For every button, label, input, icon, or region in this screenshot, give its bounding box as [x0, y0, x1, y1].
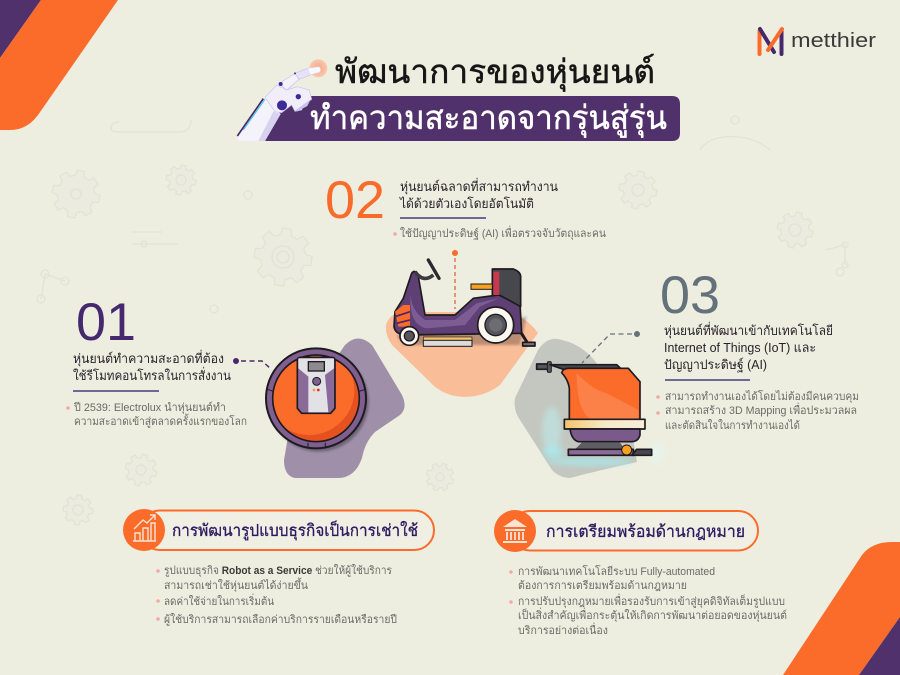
pill heading [140, 510, 434, 550]
blob: grey [515, 339, 637, 478]
panel: legal readiness [494, 510, 787, 637]
icon: robot hand [237, 59, 327, 141]
heading 01: หุ่นยนต์ทำความสะอาดที่ต้อง [73, 350, 224, 367]
connector: step 02 to scooter [452, 250, 458, 309]
connector: step 03 to machine [582, 331, 640, 363]
pill heading [510, 511, 758, 550]
panel: business model: ลดค่าใช้จ่ายในการเริ่มต้น [164, 593, 274, 608]
panel: legal readiness: เป็นสิ่งสำคัญเพื่อกระตุ้นให้เกิดการพัฒนาต่อยอดของหุ่นยนต์ [518, 607, 787, 622]
panel: legal readiness: ต้องการการเตรียมพร้อมด้านกฎหมาย [518, 579, 687, 592]
heading 03: หุ่นยนต์ที่พัฒนาเข้ากับเทคโนโลยี [664, 322, 833, 339]
panel: business model [123, 509, 434, 626]
panel: business model: สามารถเช่าใช้หุ่นยนต์ได้ง่ายขึ้น [164, 577, 308, 592]
icon: growth chart [123, 509, 165, 551]
connector: step 01 to robot [233, 358, 271, 369]
logo: metthier [760, 29, 876, 54]
step 03 text: และตัดสินใจในการทำงานเองได้ [665, 419, 800, 432]
heading text: การพัฒนารูปแบบธุรกิจเป็นการเช่าใช้ [172, 520, 418, 541]
body 03: สามารถทำงานเองได้โดยไม่ต้องมีคนควบคุม [665, 389, 859, 403]
title line 1: พัฒนาการของหุ่นยนต์ [335, 53, 655, 92]
step 03 text: สามารถสร้าง 3D Mapping เพื่อประมวลผล [665, 402, 857, 417]
body 01: ปี 2539: Electrolux นำหุ่นยนต์ทำ [73, 401, 226, 414]
steering [415, 272, 433, 278]
icon: ride-on scrubber [394, 260, 535, 346]
bullet list: รูปแบบธุรกิจ Robot as a Service ช่วยให้ผู้ใช้บริการ [164, 564, 392, 577]
body 02: ใช้ปัญญาประดิษฐ์ (AI) เพื่อตรวจจับวัตถุและคน [400, 225, 606, 240]
top-left corner decoration [0, 0, 118, 130]
panel: legal readiness: บริการอย่างต่อเนื่อง [518, 622, 608, 637]
bottom-right corner decoration [783, 542, 900, 675]
title banner [265, 96, 680, 141]
heading 02: หุ่นยนต์ฉลาดที่สามารถทำงาน [400, 178, 558, 195]
icon: robot vacuum [264, 345, 369, 452]
body [394, 271, 522, 335]
seat back [492, 269, 521, 307]
step 02 text [325, 171, 606, 240]
step 01 text [66, 293, 247, 428]
panel: legal readiness: การปรับปรุงกฎหมายเพื่อรองรับการเข้าสู่ยุคดิจิทัลเต็มรูปแบบ [518, 593, 785, 608]
icon: walk-behind scrubber with glow [537, 362, 665, 466]
step 01 text: ใช้รีโมทคอนโทรลในการสั่งงาน [73, 367, 231, 383]
icon: courthouse [494, 510, 536, 552]
heading text: การเตรียมพร้อมด้านกฎหมาย [546, 523, 745, 541]
step 01 text: ความสะอาดเข้าสู่ตลาดครั้งแรกของโลก [74, 413, 247, 428]
foot [518, 328, 527, 343]
step 03 text: Internet of Things (IoT) และ [664, 340, 816, 355]
blob: purple [284, 338, 405, 478]
title [265, 53, 680, 141]
background decorative gears [37, 116, 848, 526]
step 02 text: ได้ด้วยตัวเองโดยอัตโนมัติ [399, 196, 534, 211]
bullet list: การพัฒนาเทคโนโลยีระบบ Fully-automated [518, 564, 715, 578]
step 03 text: ปัญญาประดิษฐ์ (AI) [664, 357, 767, 373]
panel: business model: ผู้ใช้บริการสามารถเลือกค่าบริการรายเดือนหรือรายปี [164, 613, 397, 626]
step 03 text [656, 266, 859, 432]
title line 2: ทำความสะอาดจากรุ่นสู่รุ่น [310, 99, 667, 138]
wheels [478, 307, 514, 343]
number 02: 02 [325, 171, 385, 230]
number 01: 01 [76, 293, 136, 352]
logo: metthier: metthier [791, 30, 876, 52]
number 03: 03 [660, 266, 720, 325]
blob: orange [386, 312, 538, 397]
brush [423, 337, 472, 340]
